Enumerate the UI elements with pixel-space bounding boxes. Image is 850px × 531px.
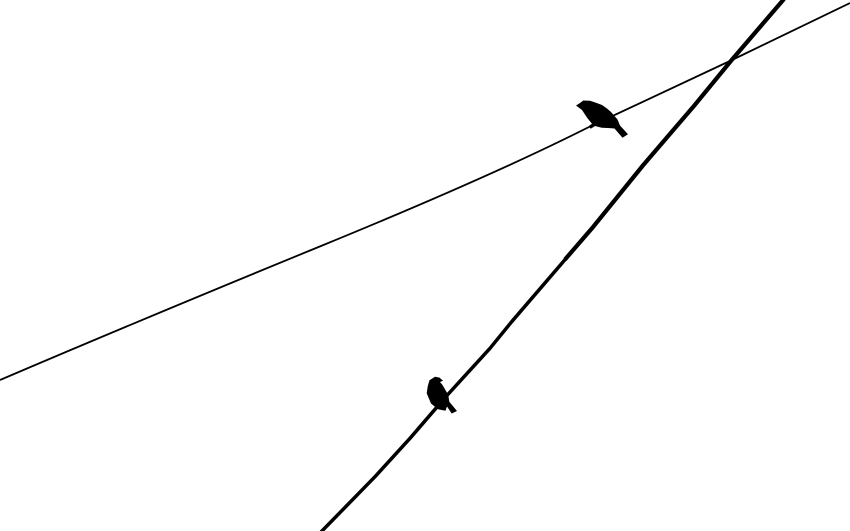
icon: lower bird	[427, 377, 457, 414]
thick wire, lower part	[321, 250, 573, 531]
thick wire, upper part	[565, 0, 784, 260]
thin wire	[0, 3, 850, 380]
icon: upper bird	[576, 100, 628, 138]
